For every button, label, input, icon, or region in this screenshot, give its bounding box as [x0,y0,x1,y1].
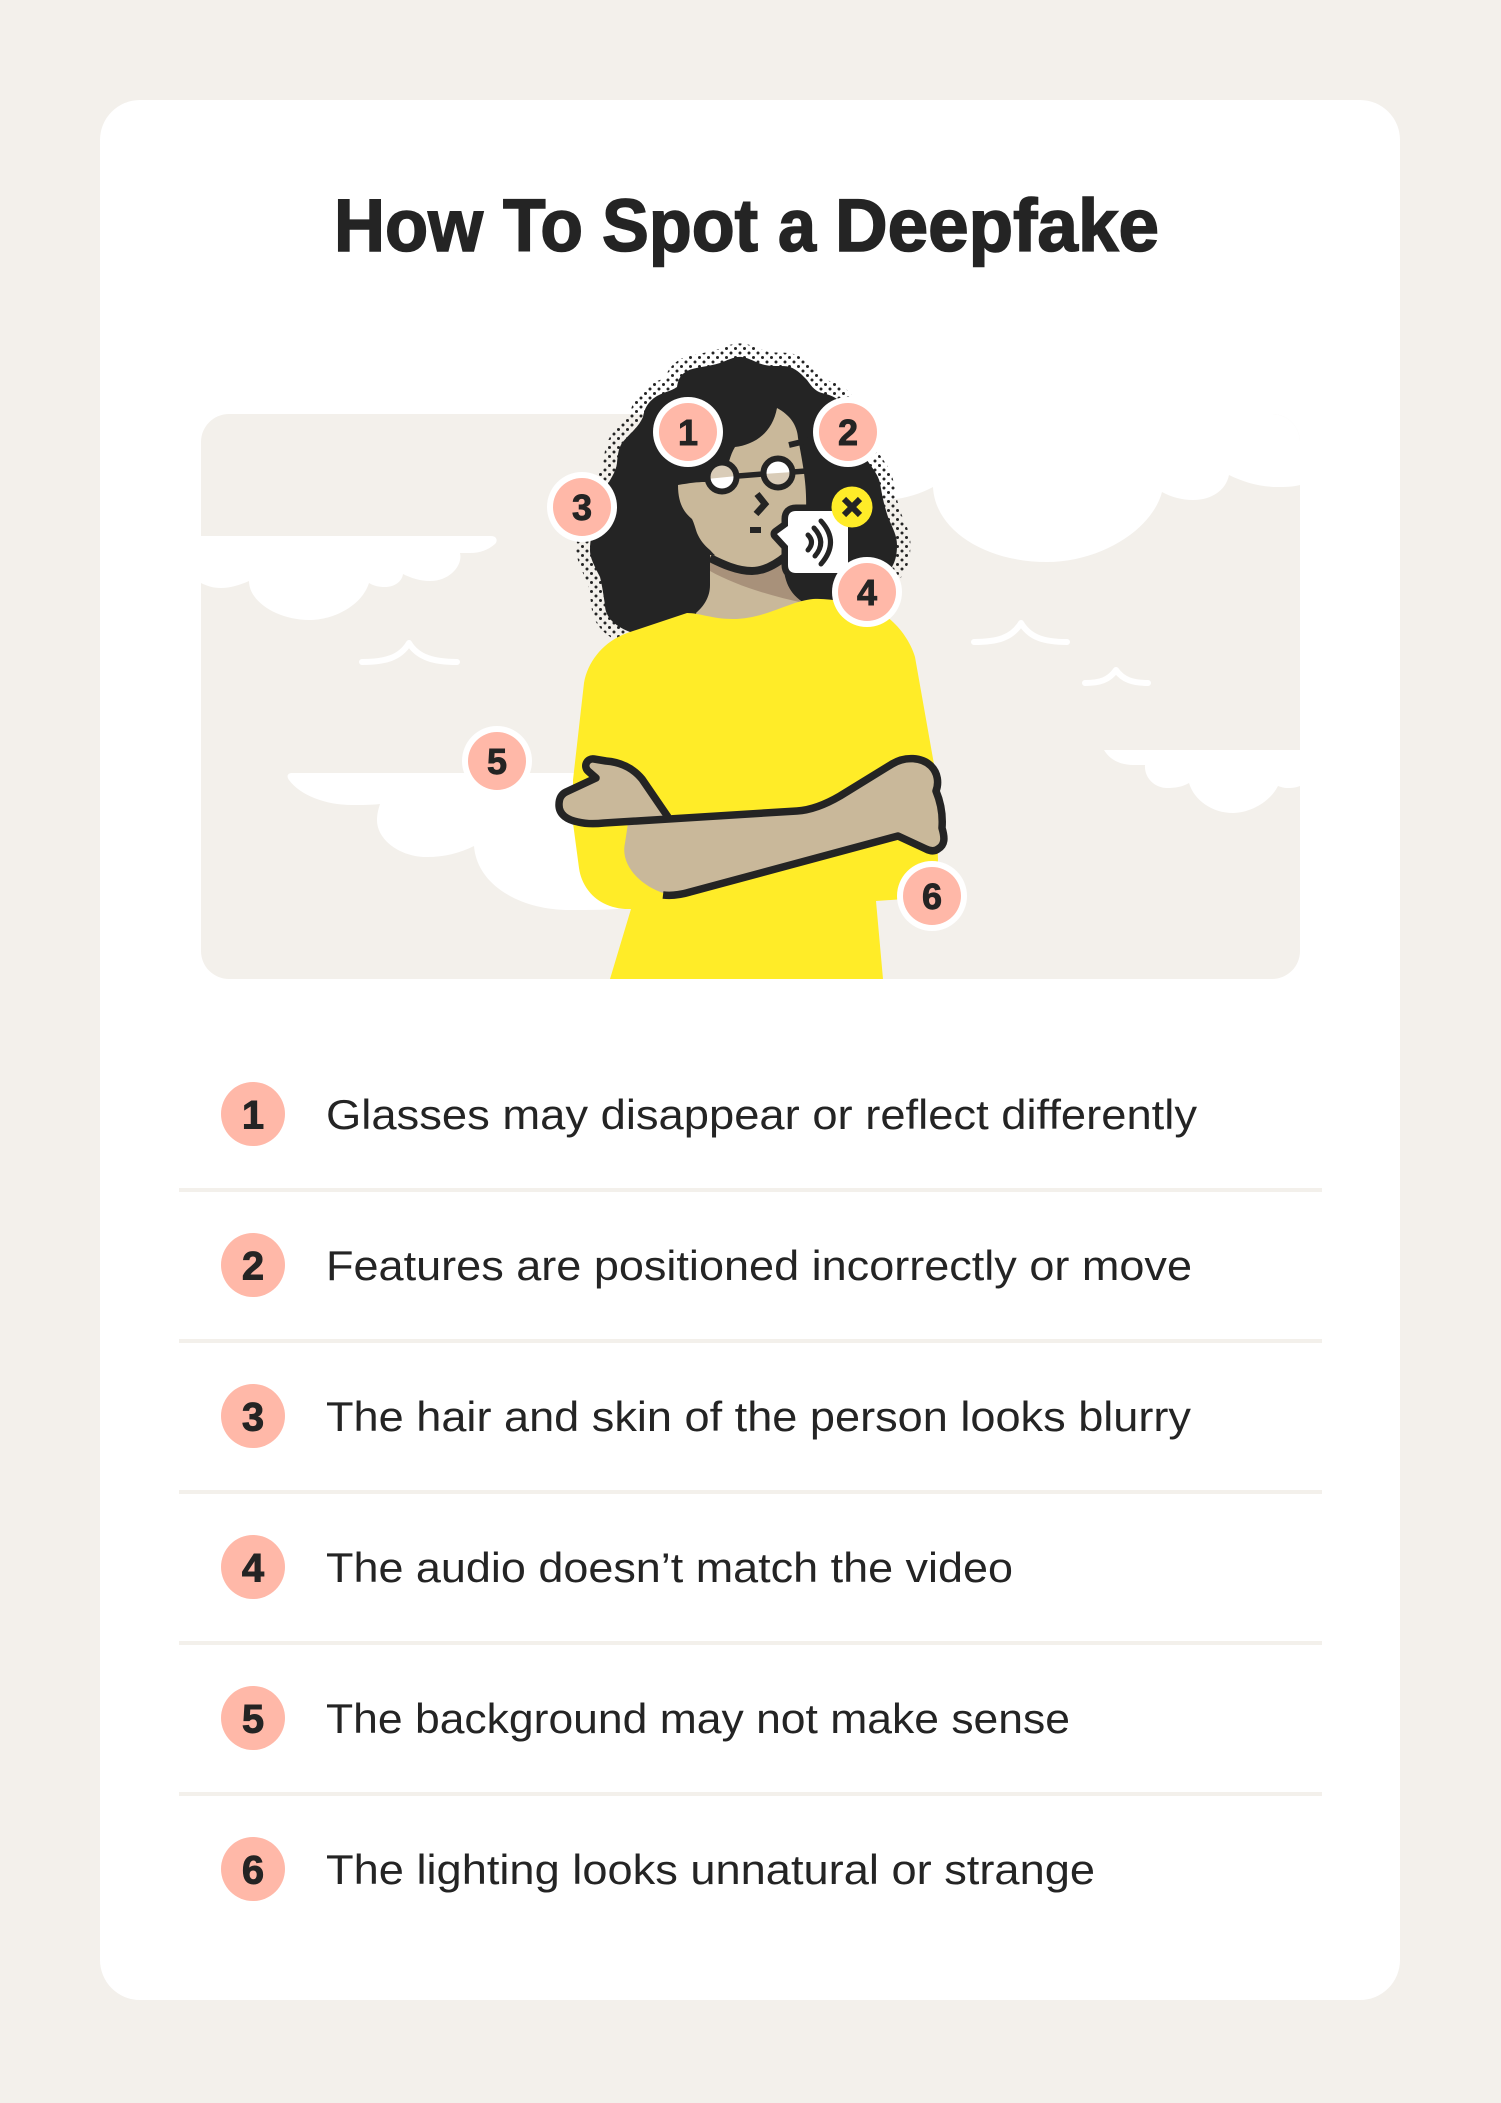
marker 3: 3 [572,487,592,528]
scene background [201,414,1300,979]
item 1: Glasses may disappear or reflect differently [326,1091,1197,1138]
neck [696,555,815,630]
marker 6 [897,861,967,931]
item 6 [221,1837,1095,1901]
cloud: upper right [868,414,1300,562]
chin line [710,556,786,571]
neck shadow [710,556,804,603]
glasses [707,458,806,493]
marker 1: 1 [678,412,698,453]
item 2: 2 [242,1244,264,1288]
item 3: 3 [242,1396,264,1440]
title: a [778,184,817,267]
left lens [708,462,736,492]
panel: illustration scene [201,357,1300,979]
item 6: The lighting looks unnatural or strange [326,1846,1095,1893]
item 5 [221,1686,1070,1750]
item 1 [221,1082,1197,1146]
item 5: 5 [242,1698,264,1742]
hair [590,357,897,632]
cloud: lower right [1104,750,1300,813]
cloud: lower left [288,773,640,910]
item 2: Features are positioned incorrectly or move [326,1242,1192,1289]
halftone edge around hair [590,357,897,632]
panel: white card [100,100,1400,2000]
face [678,408,806,570]
eyebrow [789,440,810,445]
title: Spot [602,184,758,267]
marker 4: 4 [857,572,877,613]
right lens [764,458,792,488]
nose [756,494,765,514]
yellow shirt [573,599,938,979]
crossed arms [559,759,944,895]
marker 2: 2 [838,412,858,453]
mouth [750,527,761,533]
item 1: 1 [242,1094,264,1138]
item 2 [221,1233,1192,1297]
clouds [201,400,1300,910]
title: To [503,184,583,267]
title: How [334,184,483,267]
marker 6: 6 [922,876,942,917]
cloud: upper left [201,536,497,620]
marker 5 [462,726,532,796]
item 4: The audio doesn’t match the video [326,1544,1013,1591]
marker 4 [832,557,902,627]
item 6: 6 [242,1848,264,1892]
woman figure [559,357,944,979]
bird: right upper [974,623,1067,642]
marker 5: 5 [487,741,507,782]
bird: right lower [1085,670,1148,683]
wrong-audio x badge [832,486,872,528]
item 4 [221,1535,1013,1599]
title: Deepfake [835,184,1159,267]
bridge and temple [738,471,806,476]
item 3: The hair and skin of the person looks blurry [326,1393,1191,1440]
bird: left [362,643,457,662]
item 4: 4 [242,1546,265,1590]
speech bubble with sound waves [777,511,848,573]
list of deepfake signs [179,1082,1322,1901]
marker 3 [547,472,617,542]
marker 2 [813,397,883,467]
item 5: The background may not make sense [326,1695,1070,1742]
item 3 [221,1384,1191,1448]
marker 1 [653,397,723,467]
